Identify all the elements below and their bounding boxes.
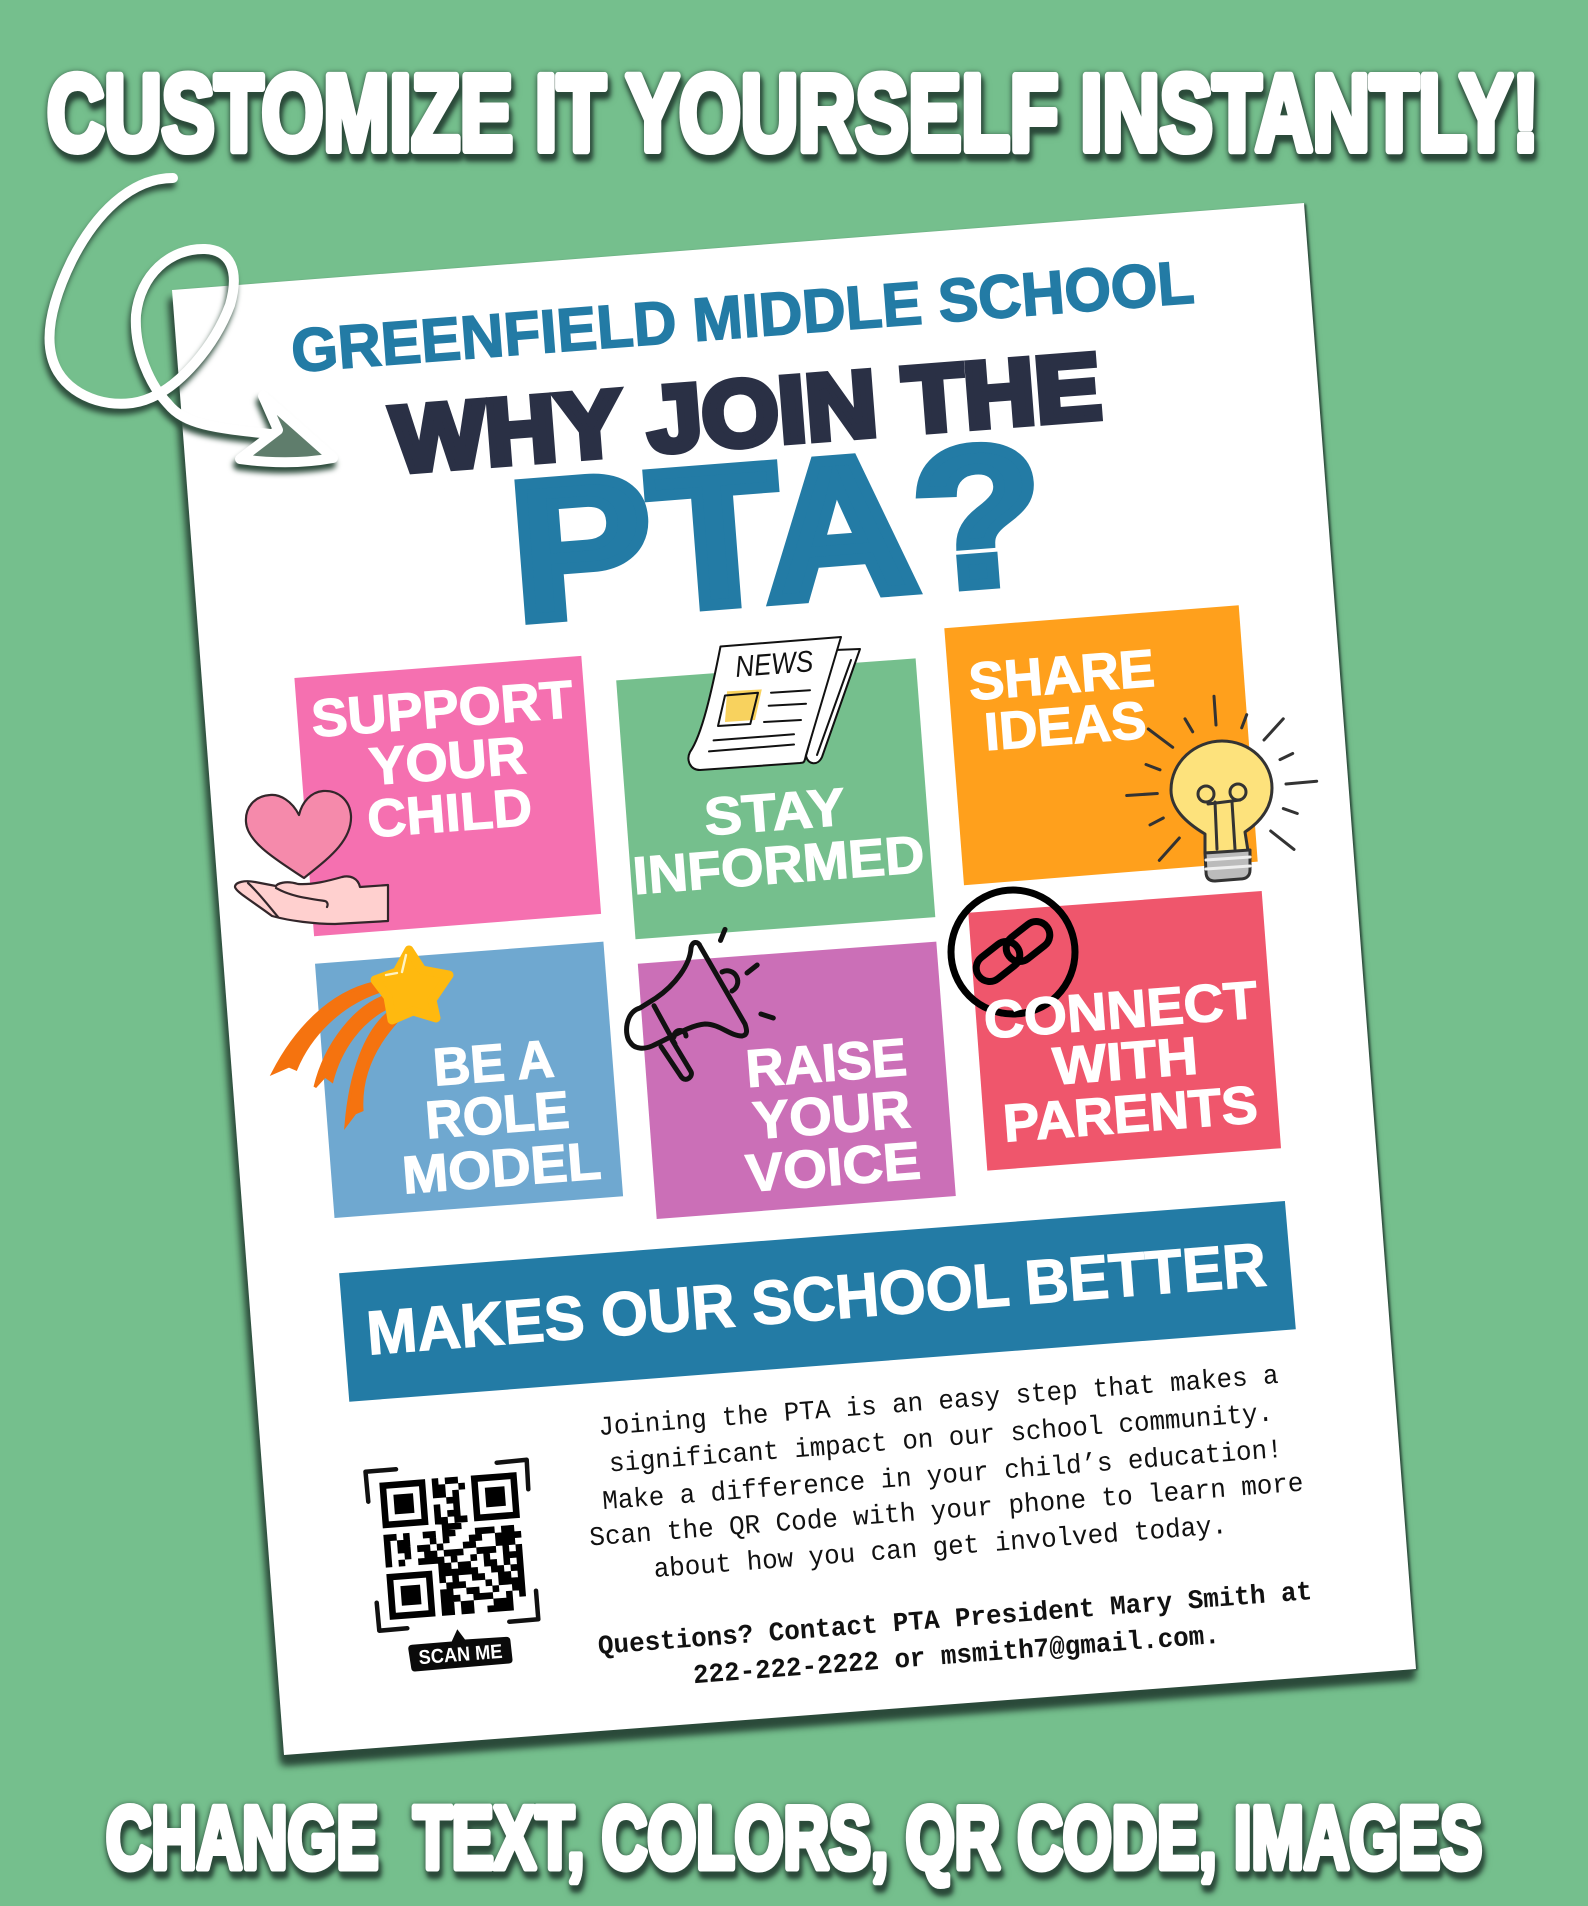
panel: be a role model: MODEL <box>400 1132 603 1206</box>
banner <box>339 1201 1296 1402</box>
school name: GREENFIELD MIDDLE SCHOOL <box>289 248 1196 385</box>
QR code <box>366 1460 538 1631</box>
title: PTA: PTA? <box>503 403 1051 662</box>
panel: stay informed: INFORMED <box>631 825 926 906</box>
description text: about how you can get involved today. <box>653 1512 1228 1586</box>
panel: support your child: YOUR <box>367 726 528 797</box>
panel: raise your voice: RAISE <box>744 1028 909 1099</box>
description text: Scan the QR Code with your phone to learn more <box>588 1470 1305 1554</box>
panel: support your child: SUPPORT <box>309 670 575 749</box>
panel: support your child <box>294 656 601 936</box>
panel: share ideas: SHARE <box>967 639 1157 712</box>
panel: share ideas: IDEAS <box>982 691 1148 762</box>
panel: share ideas <box>944 605 1258 885</box>
scan me tag <box>408 1629 513 1672</box>
poster sheet <box>172 203 1416 1755</box>
text: connect with parents <box>982 971 1260 1154</box>
description text: Make a difference in your child’s education! <box>601 1436 1284 1518</box>
icon: newspaper <box>688 637 860 770</box>
curly arrow <box>50 178 333 462</box>
icon: megaphone <box>627 929 773 1079</box>
text: connect with parents: WITH <box>1051 1027 1200 1097</box>
icon: shooting star <box>273 950 449 1125</box>
contact text: 222-222-2222 or msmith7@gmail.com. <box>692 1622 1221 1692</box>
panel: raise your voice: YOUR <box>751 1080 913 1151</box>
banner: MAKES OUR SCHOOL BETTER <box>364 1231 1269 1369</box>
icon: newspaper: NEWS <box>734 645 814 684</box>
description text: Joining the PTA is an easy step that makes a <box>597 1362 1280 1444</box>
text: connect with parents: PARENTS <box>1001 1075 1260 1154</box>
title: why join the: WHY JOIN THE <box>389 334 1104 492</box>
panel: be a role model: ROLE <box>423 1081 571 1150</box>
panel: be a role model: BE A <box>431 1029 556 1098</box>
panel: raise your voice: VOICE <box>744 1131 923 1204</box>
icon: heart in hand <box>235 791 388 924</box>
text: connect with parents: CONNECT <box>982 971 1260 1050</box>
icon: link circle <box>951 890 1075 1014</box>
contact text: Questions? Contact PTA President Mary Smith at <box>597 1578 1313 1663</box>
panel: support your child: CHILD <box>365 778 534 849</box>
panel: connect with parents <box>968 891 1281 1171</box>
panel: stay informed: STAY <box>702 778 847 847</box>
icon: light bulb <box>1127 696 1317 881</box>
scan me tag: SCAN ME <box>418 1641 503 1669</box>
description text <box>588 1362 1305 1586</box>
panel: be a role model <box>315 942 623 1218</box>
panel: stay informed <box>616 658 935 939</box>
panel: raise your voice <box>638 942 956 1219</box>
description text: significant impact on our school community. <box>608 1400 1274 1481</box>
